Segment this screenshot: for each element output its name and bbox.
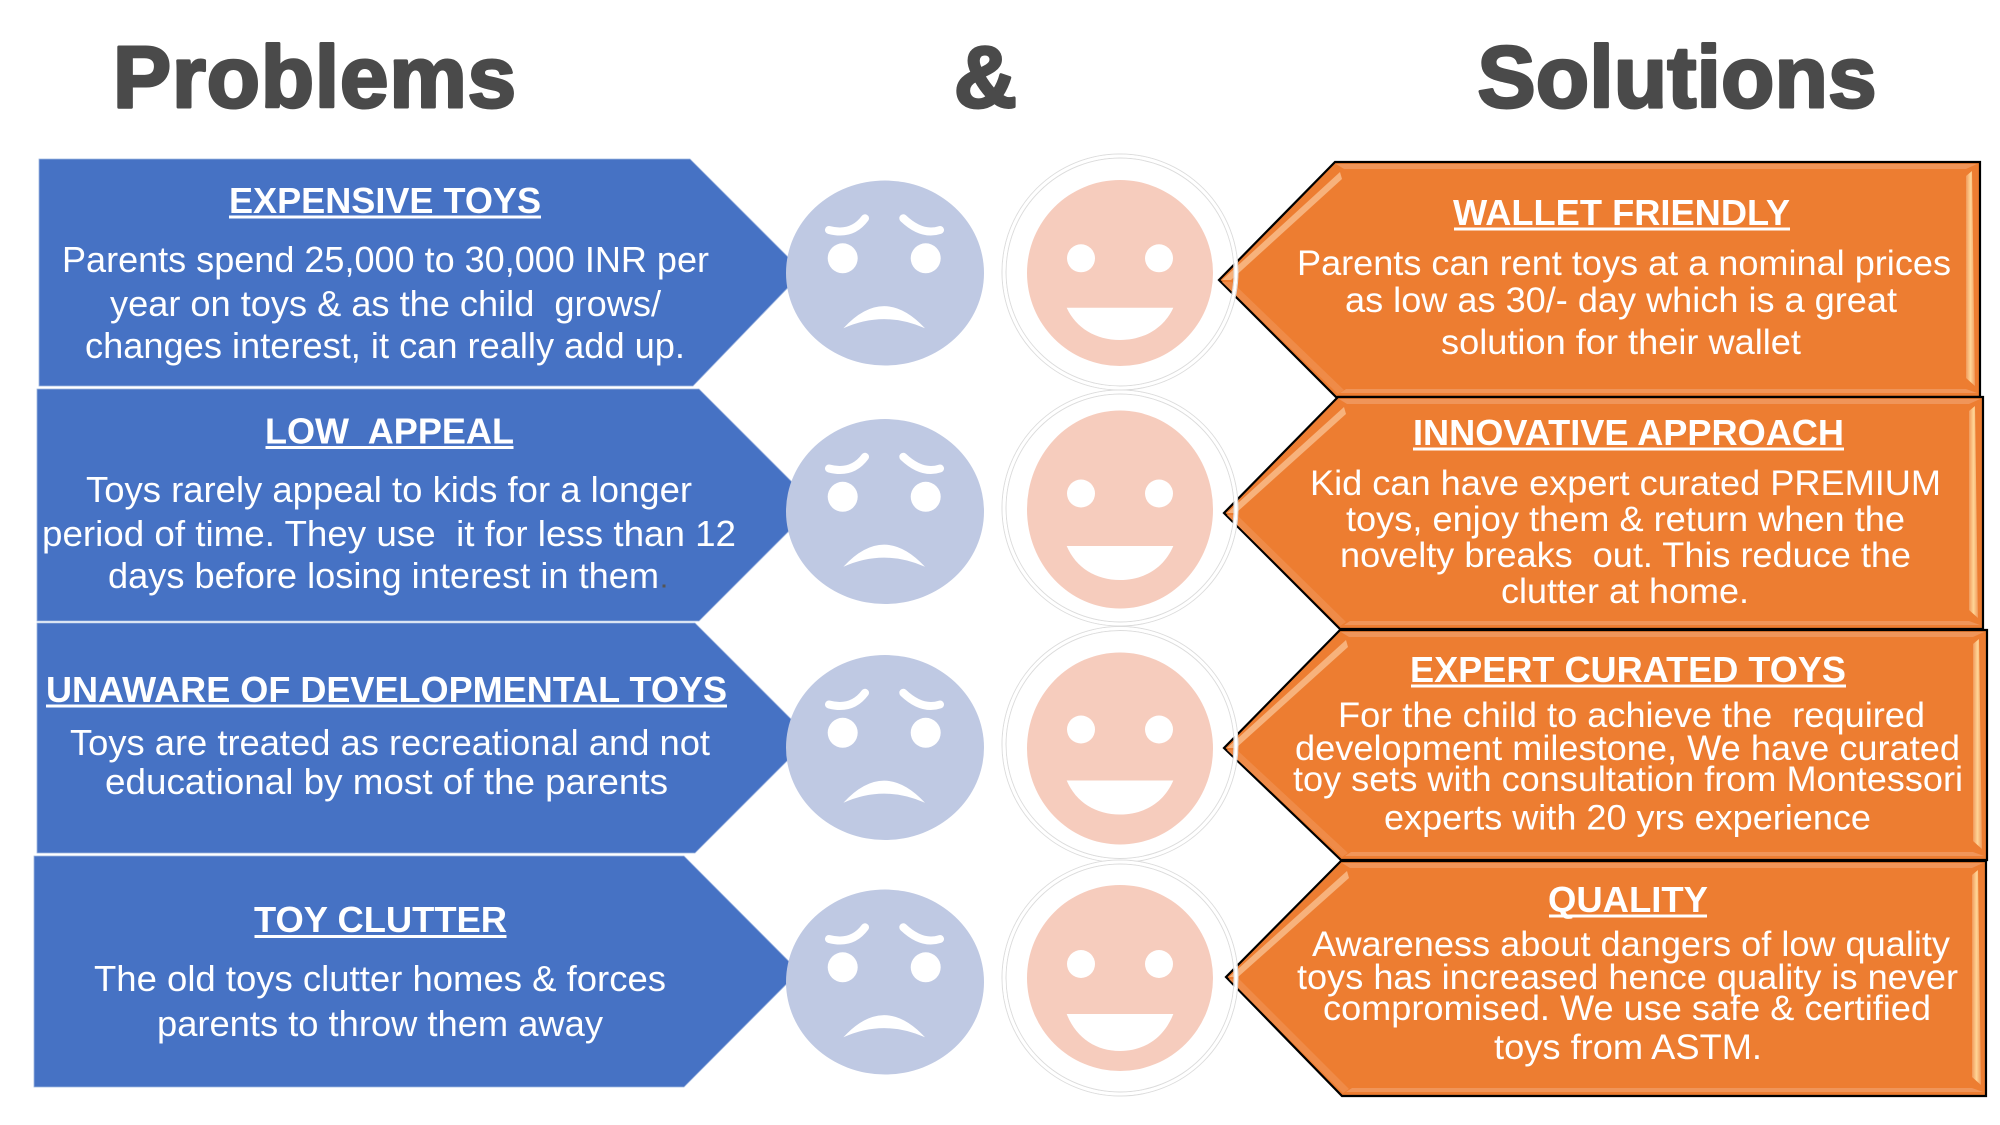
body text: expert curated toys: experts with 20 yrs experience — [1384, 798, 1871, 838]
blue arrow shape — [37, 623, 810, 853]
panel: quality — [1226, 861, 1986, 1096]
body text: low appeal: period of time. They use it for less than 12 — [42, 513, 736, 554]
body text: wallet friendly: solution for their wallet — [1441, 323, 1801, 362]
blue arrow shape — [39, 159, 803, 386]
body text: low appeal: Toys rarely appeal to kids for a longer — [86, 469, 692, 510]
heading: expert curated toys: EXPERT CURATED TOYS — [1410, 649, 1846, 690]
body text: quality — [1297, 925, 1958, 1067]
title: Solutions: Solutions — [1478, 29, 1876, 126]
panel: wallet friendly — [1219, 162, 1980, 397]
icon: sad face 2 — [786, 419, 984, 604]
orange arrow shape — [1224, 397, 1983, 629]
body text: quality: toys from ASTM. — [1494, 1028, 1762, 1067]
body text: unaware of developmental toys: educational by most of the parents — [105, 761, 668, 802]
heading: low appeal: LOW APPEAL — [265, 410, 514, 452]
body text: toy clutter: The old toys clutter homes & forces — [94, 958, 666, 999]
title: Problems: Problems — [113, 29, 516, 126]
panel: unaware of developmental toys — [37, 623, 810, 853]
body text: toy clutter — [94, 958, 666, 1044]
body text: innovative approach: novelty breaks out. This reduce the — [1340, 536, 1911, 575]
heading: toy clutter: TOY CLUTTER — [254, 899, 507, 940]
body text: quality: compromised. We use safe & certified — [1323, 989, 1931, 1028]
body text: unaware of developmental toys — [70, 722, 710, 802]
panel: expensive toys — [39, 159, 803, 386]
icon: sad face 1 — [786, 180, 984, 366]
blue arrow shape — [34, 856, 799, 1087]
body text: unaware of developmental toys: Toys are treated as recreational and not — [70, 722, 710, 763]
orange arrow shape — [1219, 162, 1980, 397]
bevel highlights — [1227, 632, 1984, 857]
panel: low appeal — [37, 389, 815, 621]
heading: quality: QUALITY — [1548, 879, 1708, 920]
body text: wallet friendly: Parents can rent toys at a nominal prices — [1297, 244, 1951, 283]
icon: happy face 3 with ring — [1002, 626, 1238, 862]
body text: expensive toys: year on toys & as the child grows/ — [110, 283, 661, 324]
body text: wallet friendly — [1297, 244, 1951, 362]
body text: quality: toys has increased hence quality is never — [1297, 958, 1958, 997]
icon: happy face 1 with ring — [1002, 154, 1238, 390]
body text: expert curated toys: development milestone, We have curated — [1295, 729, 1960, 768]
body text: expensive toys: Parents spend 25,000 to 30,000 INR per — [62, 239, 709, 280]
body text: low appeal — [42, 469, 736, 596]
bevel highlights — [1227, 399, 1980, 626]
body text: low appeal: days before losing interest in them — [108, 555, 659, 596]
heading: wallet friendly: WALLET FRIENDLY — [1453, 192, 1790, 233]
body text: innovative approach: clutter at home. — [1501, 572, 1749, 611]
body text: innovative approach: Kid can have expert curated PREMIUM — [1310, 464, 1941, 503]
body text: innovative approach — [1310, 464, 1941, 611]
body text: expensive toys — [62, 239, 709, 366]
body text: wallet friendly: as low as 30/- day which is a great — [1345, 281, 1897, 320]
icon: happy face 4 with ring — [1002, 860, 1238, 1096]
heading: expensive toys: EXPENSIVE TOYS — [229, 180, 541, 221]
body text: expert curated toys: toy sets with consultation from Montessori — [1293, 760, 1963, 799]
body text: expert curated toys: For the child to achieve the required — [1338, 696, 1925, 735]
body text: quality: Awareness about dangers of low quality — [1312, 925, 1951, 964]
orange arrow shape — [1224, 630, 1987, 860]
blue arrow shape — [37, 389, 815, 621]
panel: toy clutter — [34, 856, 799, 1087]
body text: toy clutter: parents to throw them away — [157, 1003, 603, 1044]
body text: expensive toys: changes interest, it can really add up. — [85, 325, 685, 366]
icon: sad face 3 — [786, 655, 984, 840]
heading: innovative approach: INNOVATIVE APPROACH — [1413, 412, 1844, 453]
panel: innovative approach — [1224, 397, 1983, 629]
panel: expert curated toys — [1224, 630, 1987, 860]
heading: unaware of developmental toys: UNAWARE OF DEVELOPMENTAL TOYS — [46, 669, 727, 710]
bevel highlights — [1222, 164, 1977, 394]
icon: happy face 2 with ring — [1002, 390, 1238, 626]
orange arrow shape — [1226, 861, 1986, 1096]
title: ampersand: & — [954, 29, 1017, 126]
icon: sad face 4 — [786, 890, 984, 1074]
body text: expert curated toys — [1293, 696, 1963, 838]
body text: innovative approach: toys, enjoy them & return when the — [1346, 500, 1905, 539]
bevel highlights — [1229, 863, 1983, 1093]
